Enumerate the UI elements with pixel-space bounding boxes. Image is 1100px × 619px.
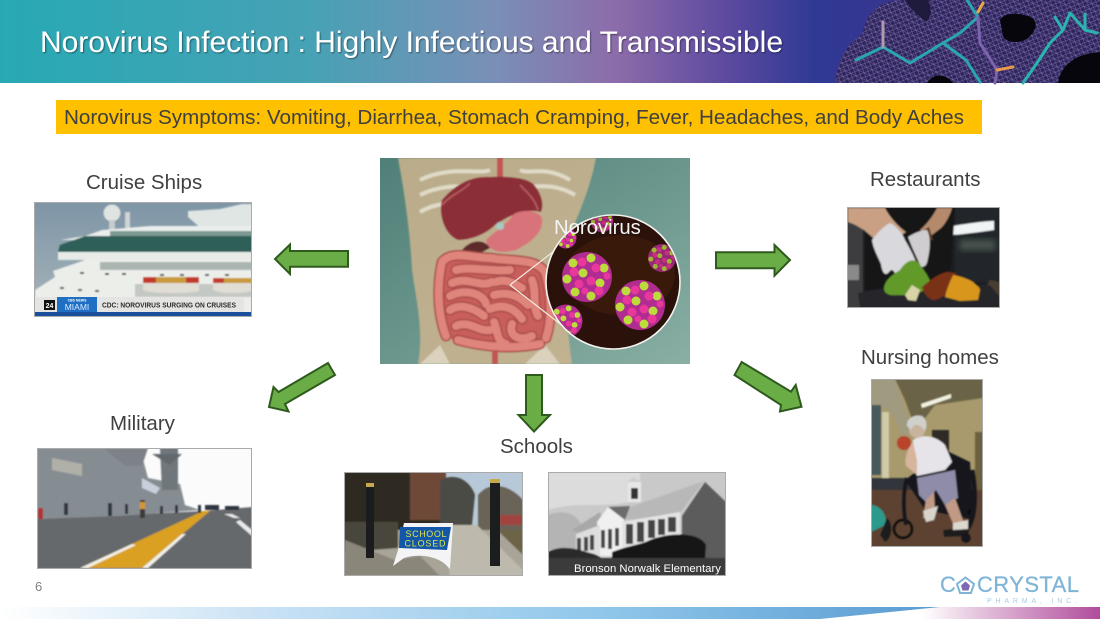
wheelchair [905, 450, 974, 520]
stomach [486, 211, 542, 252]
arrow: to military [269, 363, 335, 412]
chicken [922, 272, 957, 300]
gloves [872, 223, 919, 287]
symptoms callout: Norovirus Symptoms: Vomiting, Diarrhea, Stomach Cramping, Fever, Headaches, and Body Aches [64, 106, 964, 129]
bushes [548, 548, 602, 564]
salad [884, 260, 930, 295]
liver [441, 177, 542, 240]
photo caption: Bronson Norwalk Elementary [574, 563, 721, 575]
visitor chair [871, 505, 886, 532]
right wing wall [682, 482, 726, 560]
sign [393, 523, 453, 569]
arrow: to restaurants [716, 245, 790, 276]
yellow runway line [80, 511, 210, 568]
photo: Bronson Norwalk Elementary school [548, 472, 726, 576]
logo icon [957, 578, 974, 593]
heading: Restaurants: Restaurants [870, 168, 981, 191]
person [912, 436, 952, 476]
logo: Cocrystal Pharma: C [940, 572, 956, 597]
posts [366, 483, 374, 558]
footer bar [0, 607, 1100, 619]
molecular mesh artwork [835, 0, 1100, 83]
windows [577, 517, 676, 552]
logo: Cocrystal Pharma [940, 572, 1079, 605]
hull and island [37, 448, 200, 519]
heading: Nursing homes: Nursing homes [861, 346, 999, 369]
magnifier lines [510, 248, 568, 330]
news banner [34, 297, 252, 317]
photo: cruise ship [34, 202, 252, 317]
title: Norovirus Infection : Highly Infectious and Transmissible [40, 26, 783, 59]
arrow: to cruise ships [275, 244, 348, 274]
arrow: to schools [518, 375, 550, 432]
sign: CLOSED [404, 538, 446, 548]
deck [37, 507, 252, 569]
potato [945, 275, 980, 301]
heading: Military: Military [110, 412, 176, 435]
arrow: to nursing homes [734, 362, 802, 412]
label: Norovirus: Norovirus [554, 217, 641, 239]
news banner: MIAMI [65, 302, 89, 312]
photo: flight deck of military ship [37, 448, 252, 569]
logo: Cocrystal Pharma: PHARMA, INC. [987, 598, 1077, 605]
crew [64, 503, 239, 516]
photo: restaurant food preparation [847, 207, 1000, 308]
intestines [437, 252, 554, 351]
symptoms callout [56, 100, 982, 134]
sign: SCHOOL [406, 529, 446, 539]
heading: Schools: Schools [500, 435, 573, 458]
cupola [628, 482, 641, 502]
photo: nursing home resident in wheelchair [871, 379, 983, 547]
central illustration: norovirus in the digestive system [380, 158, 690, 364]
header banner [0, 0, 1100, 83]
news banner: CDC: NOROVIRUS SURGING ON CRUISES [102, 300, 236, 310]
lifeboats [143, 278, 199, 293]
logo: Cocrystal Pharma: CRYSTAL [977, 572, 1079, 597]
magnified virus circle [546, 210, 680, 349]
news banner: CBS NEWS [68, 298, 87, 302]
front gable and wing [597, 507, 625, 556]
arms [848, 208, 906, 243]
photo: school closed sign [344, 472, 523, 576]
page number: 6 [35, 579, 42, 594]
heading: Cruise Ships: Cruise Ships [86, 171, 202, 194]
roof [622, 481, 704, 520]
cutting board [858, 285, 1000, 308]
torso [398, 158, 596, 364]
news banner: 24 [46, 303, 53, 310]
